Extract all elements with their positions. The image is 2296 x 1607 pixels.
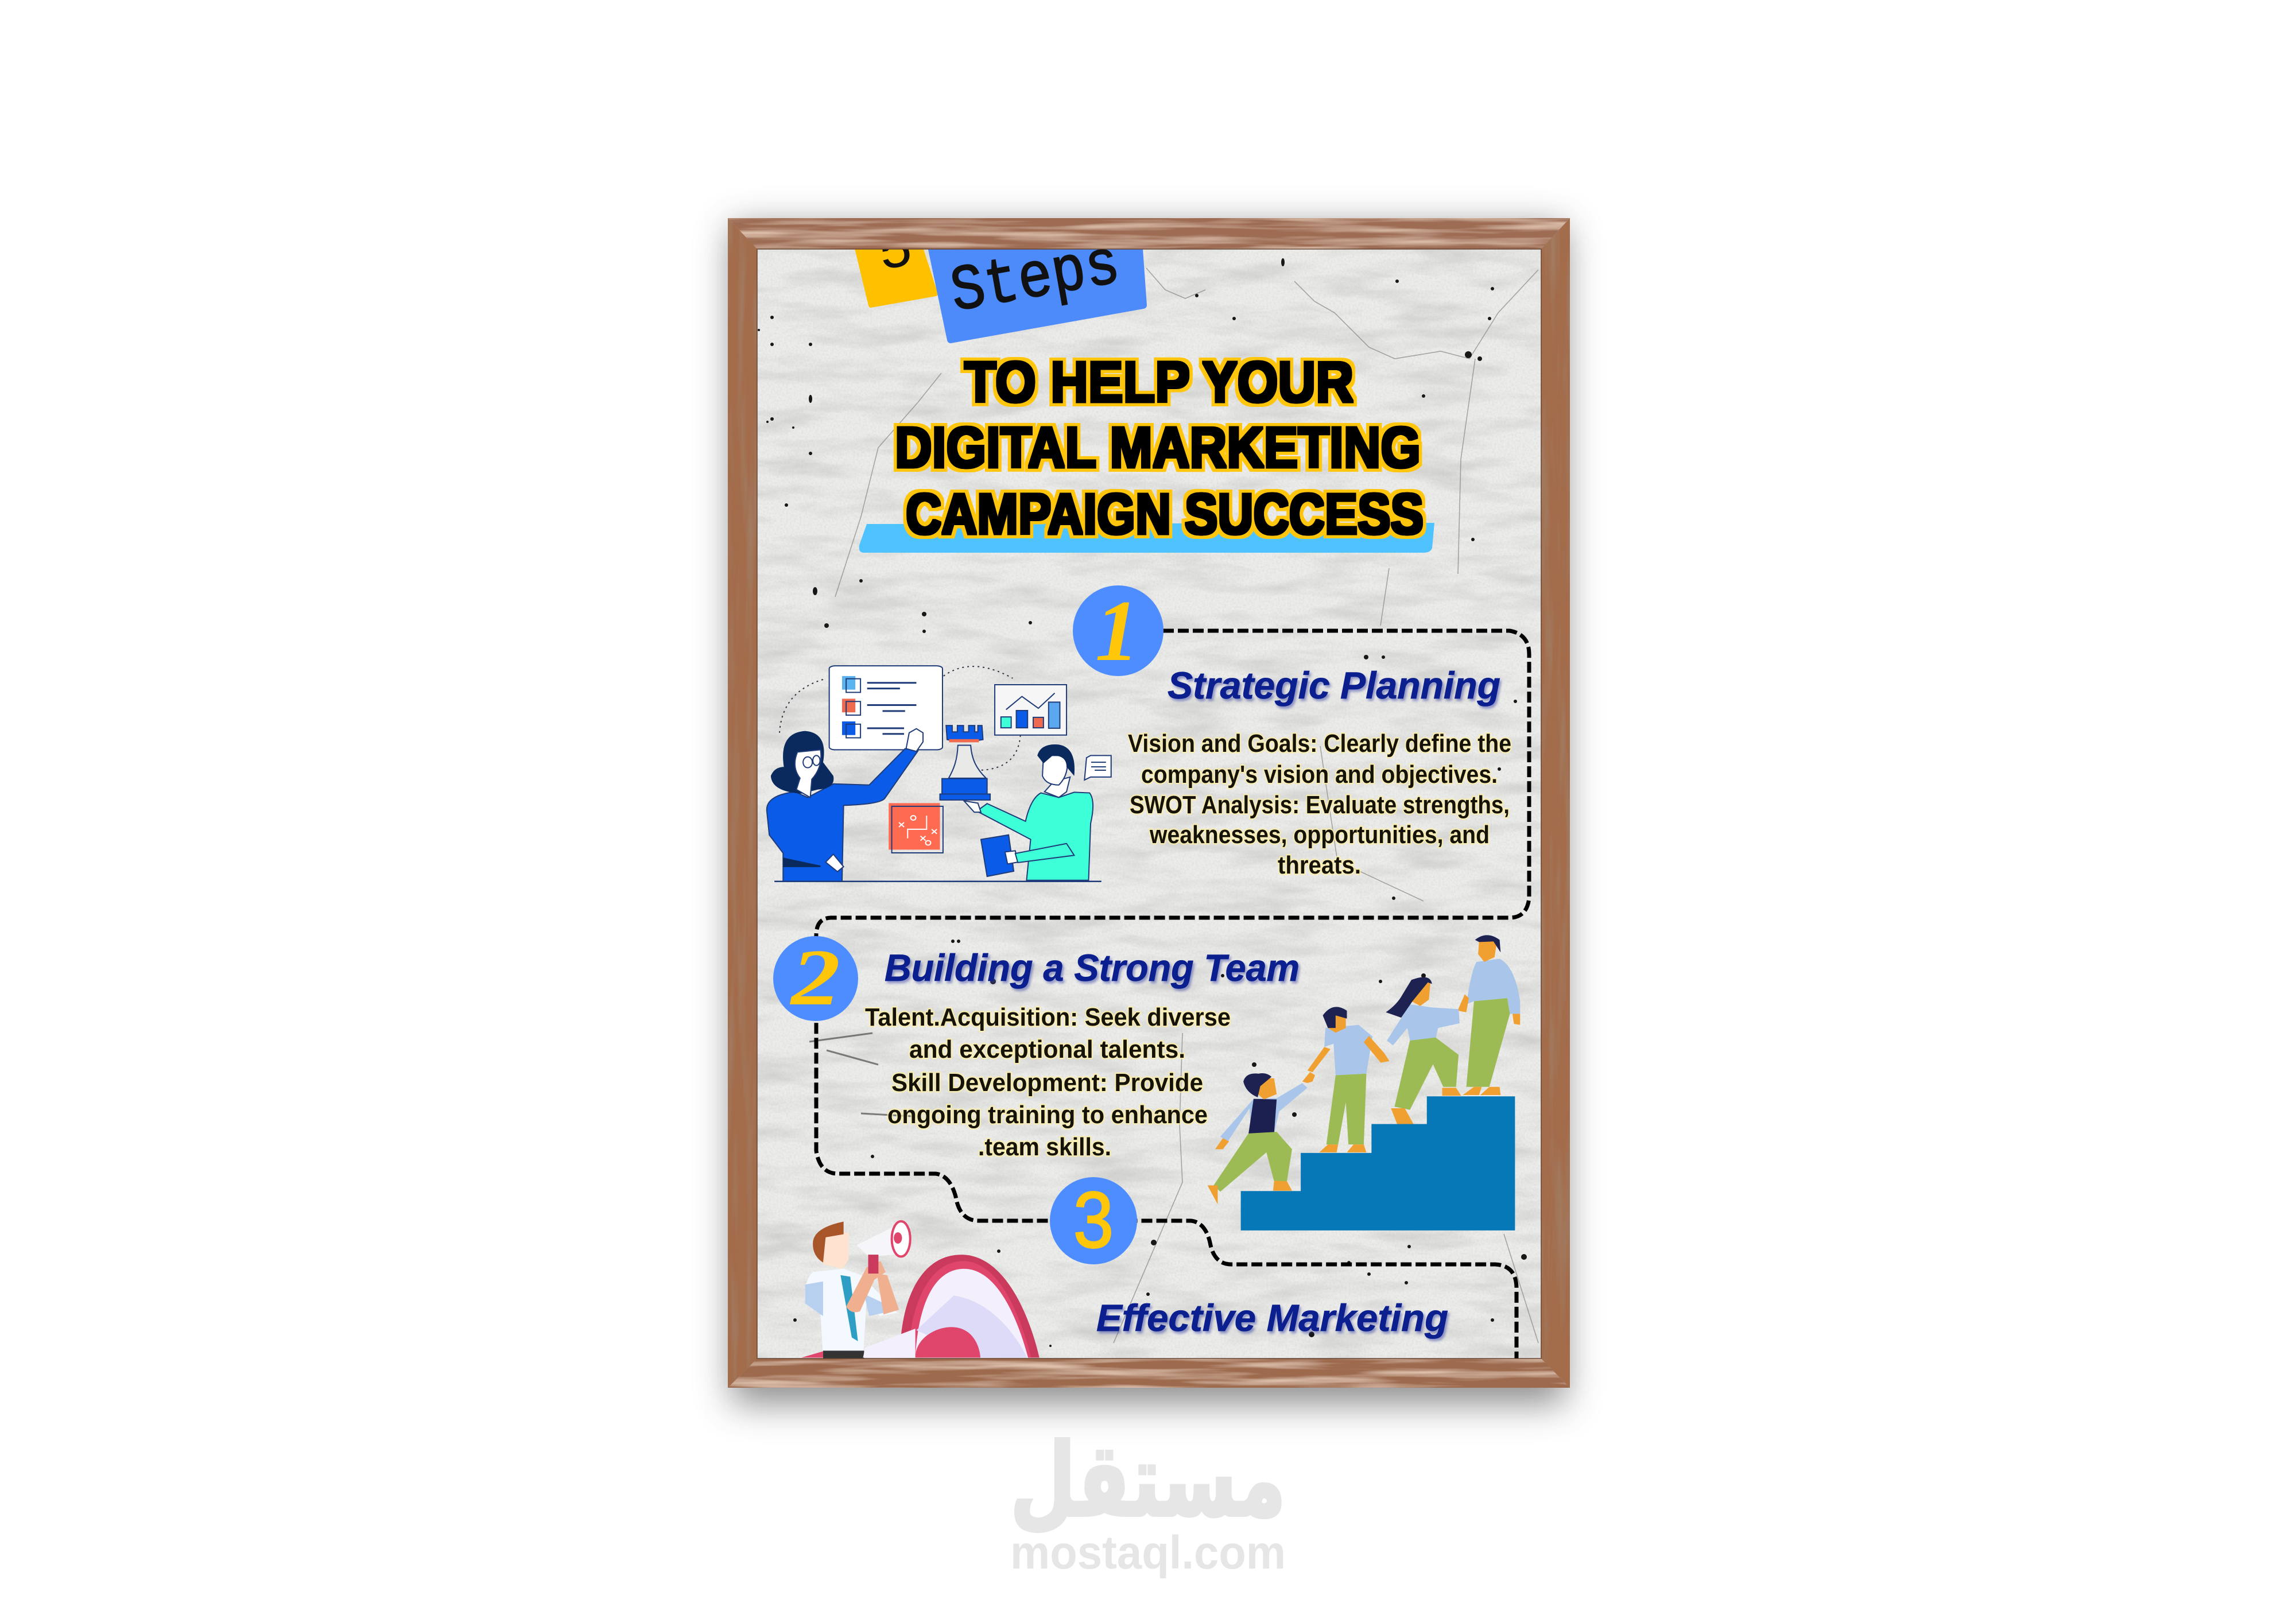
strategy card orange [889, 803, 943, 853]
title [895, 350, 1424, 546]
speech bubble [1084, 755, 1111, 780]
steps card blue [928, 249, 1147, 343]
ground line [774, 881, 1102, 882]
climber 3 [1386, 977, 1461, 1124]
poster panel [757, 218, 1541, 1358]
climber 2 [1308, 1007, 1390, 1152]
text: strong team body [865, 1003, 1231, 1161]
chart card [995, 685, 1066, 735]
text: strong team body: Skill Development: Provide [891, 1069, 1203, 1097]
checklist board [829, 666, 943, 750]
text: strong team body: ongoing training to enhance [887, 1101, 1208, 1129]
watermark logo: مستقل [1010, 1423, 1286, 1539]
heading: strategic planning: Strategic Planning [1168, 664, 1500, 707]
illustration: team climbing stairs [801, 935, 1520, 1358]
text: strong team body: .team skills. [978, 1133, 1111, 1161]
illustration: strategic planning team [767, 666, 1111, 882]
step 3 badge [1050, 1176, 1137, 1264]
text: strategic planning body [1128, 729, 1511, 879]
step 1 badge [1073, 583, 1163, 679]
title: CAMPAIGN SUCCESS [906, 482, 1424, 546]
text: strategic planning body: company's vision and objectives. [1141, 760, 1498, 789]
step number card yellow: 5 [873, 218, 918, 288]
man [964, 744, 1093, 880]
heading: building a strong team: Building a Strong Team [885, 946, 1300, 989]
heading: effective marketing: Effective Marketing [1096, 1297, 1448, 1339]
concrete background [757, 249, 1541, 1358]
frame drop shadow [732, 227, 1565, 1403]
climber 4 [1457, 935, 1520, 1095]
woman [767, 729, 923, 882]
step 1 badge: 1 [1095, 583, 1139, 679]
wooden frame [728, 218, 1570, 1388]
dotted arcs [779, 666, 1021, 770]
steps card blue: Steps [945, 228, 1125, 329]
text: strong team body: and exceptional talents. [909, 1035, 1185, 1063]
chess tower [940, 725, 990, 800]
text: strategic planning body: weaknesses, opportunities, and [1149, 821, 1490, 849]
brush underline [859, 523, 1434, 553]
climber 1 [1208, 1072, 1315, 1204]
big megaphone [801, 1255, 1040, 1357]
watermark logo [1010, 1423, 1286, 1579]
title: DIGITAL MARKETING [895, 416, 1421, 480]
text: strong team body: Talent.Acquisition: Seek diverse [865, 1003, 1231, 1031]
text: strategic planning body: SWOT Analysis: Evaluate strengths, [1130, 791, 1510, 819]
watermark logo: mostaql.com [1010, 1527, 1286, 1579]
text: strategic planning body: Vision and Goals: Clearly define the [1128, 729, 1511, 758]
step number card yellow [855, 249, 938, 308]
step 3 badge: 3 [1073, 1176, 1114, 1264]
step 2 badge: 2 [790, 933, 840, 1022]
megaphone man [805, 1221, 910, 1358]
step 2 badge [773, 933, 858, 1022]
dashed connector path [816, 631, 1529, 1358]
text: strategic planning body: threats. [1278, 851, 1361, 879]
stairs [1241, 1096, 1515, 1231]
title: TO HELP YOUR [964, 350, 1353, 414]
